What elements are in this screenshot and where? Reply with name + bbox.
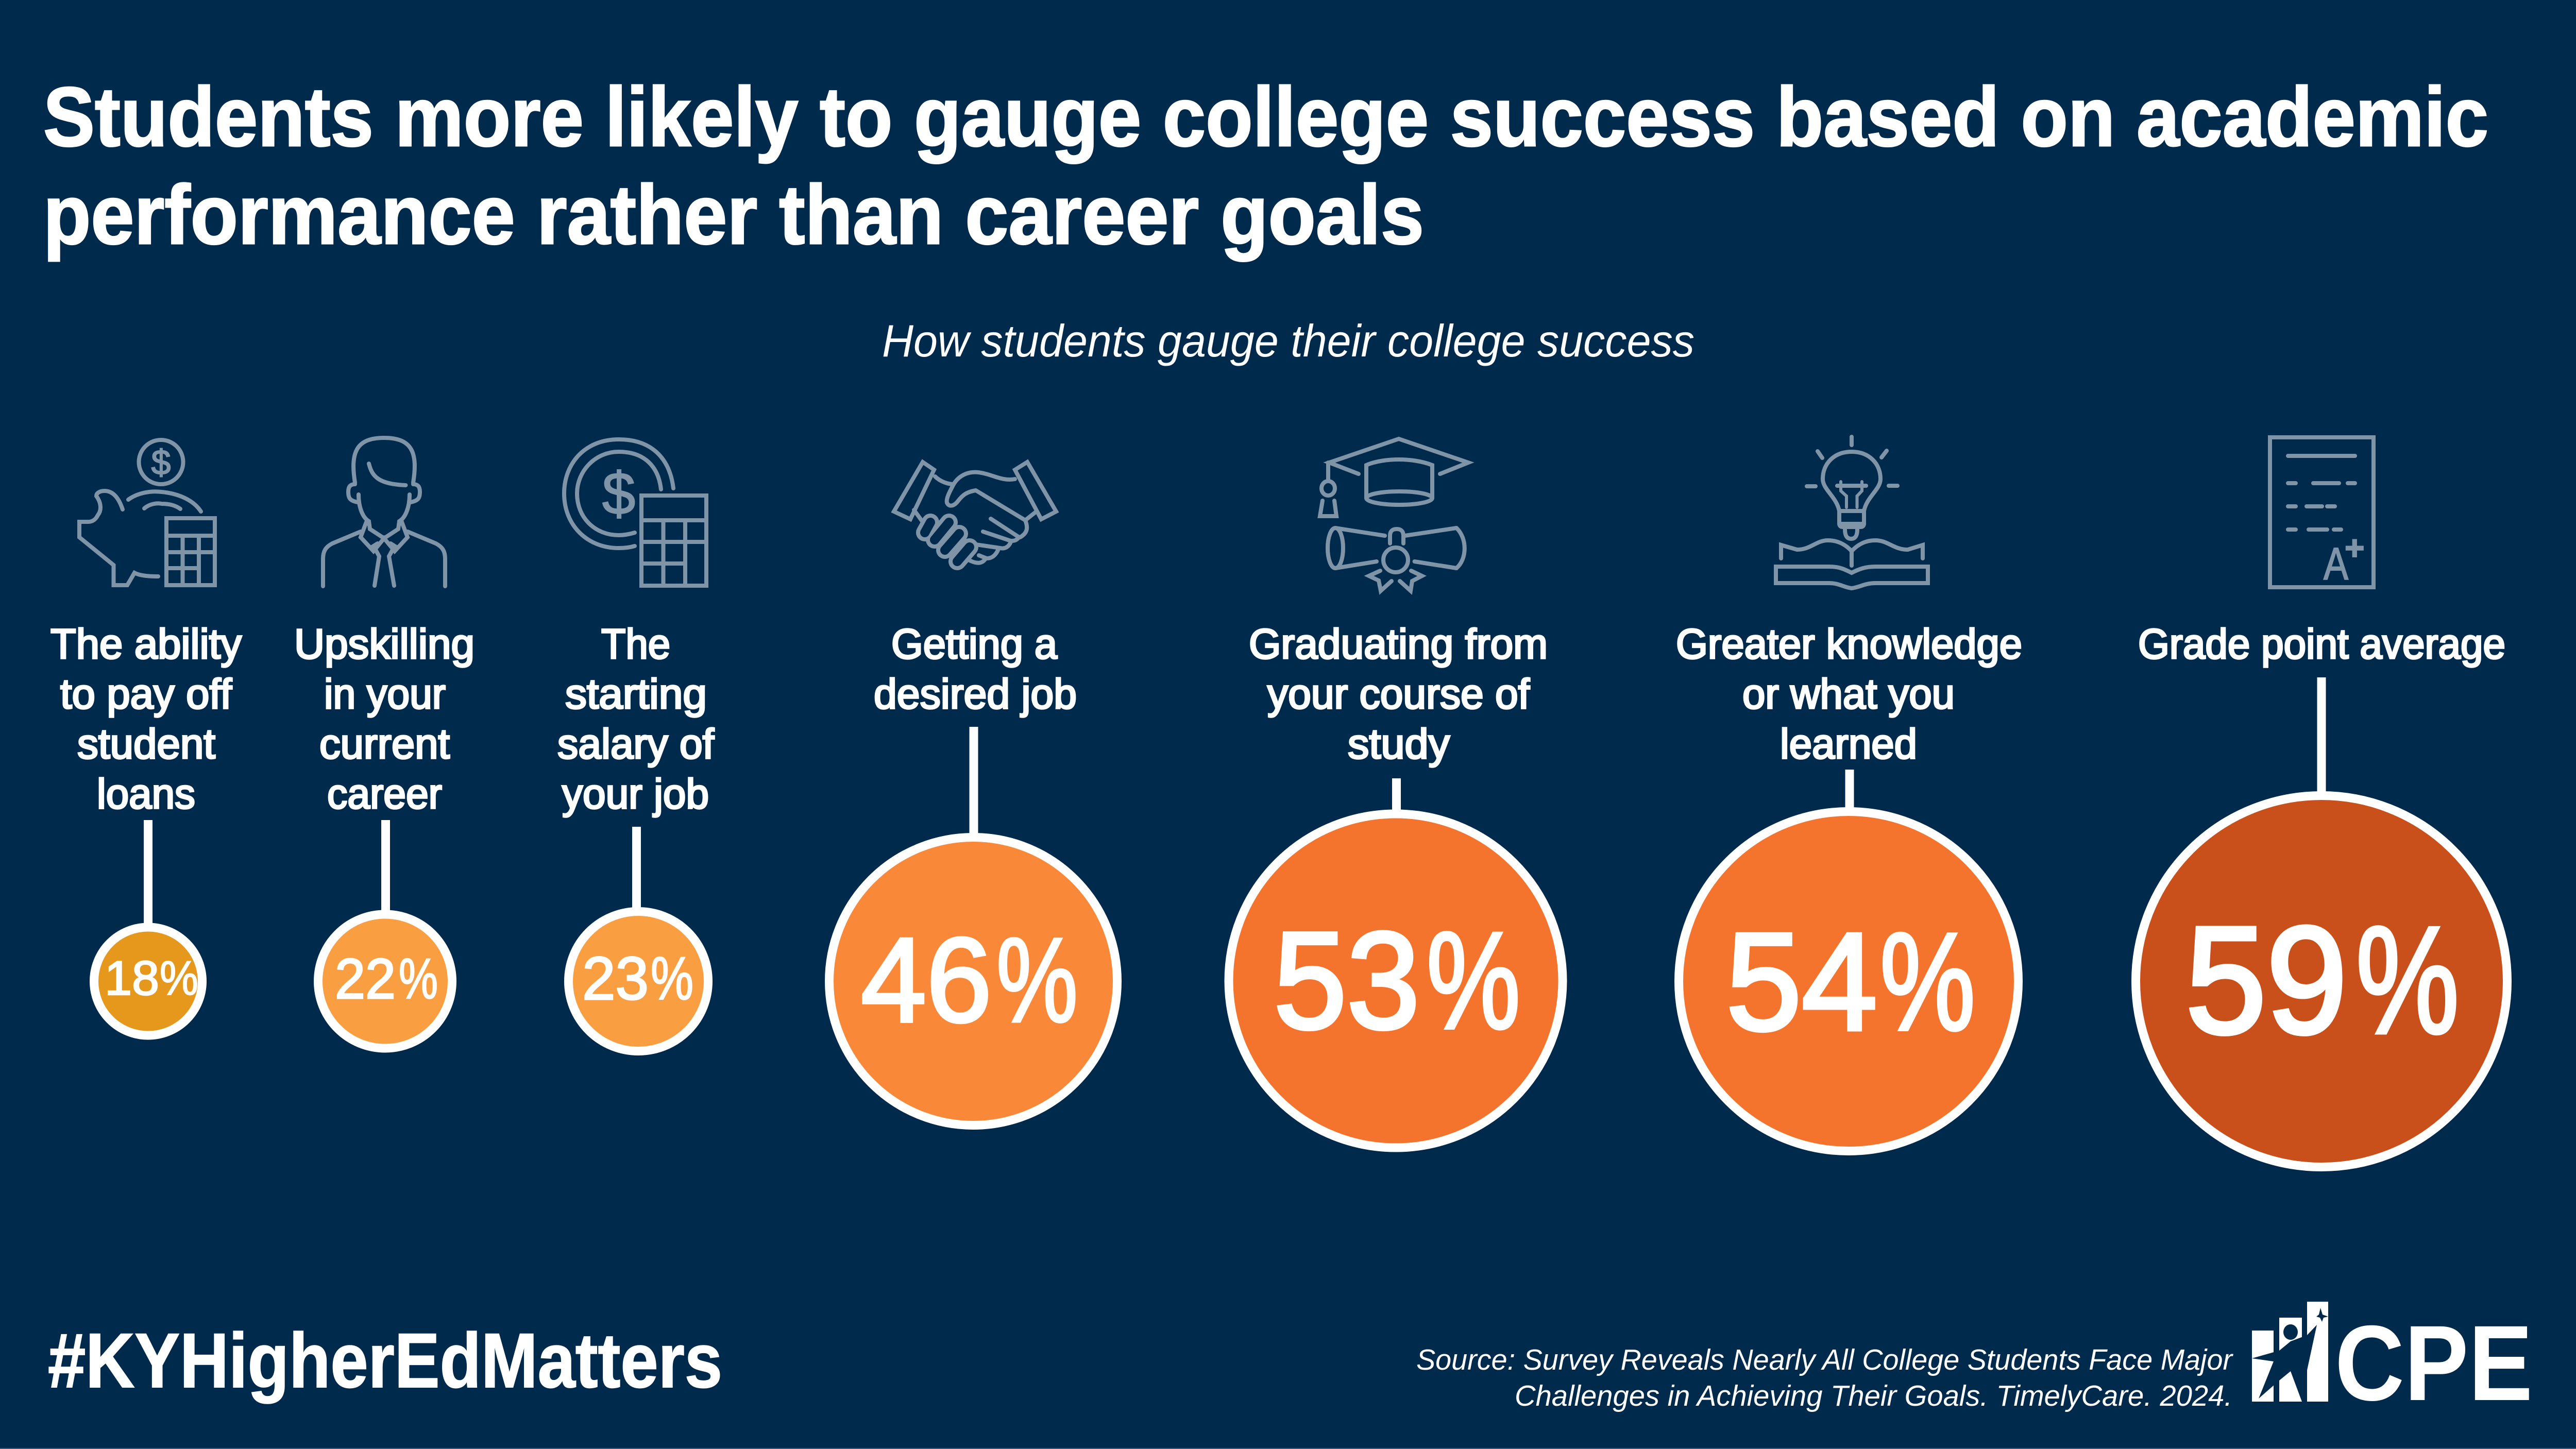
icon: coins and calculator <box>564 439 706 586</box>
subtitle: How students gauge their college success <box>882 315 1694 366</box>
column: greater knowledge or what you learned <box>1676 437 2022 1151</box>
logo wordmark: CPE <box>2335 1304 2533 1423</box>
circle 53%: 53 <box>1274 903 1420 1058</box>
icon: graded test paper: A <box>2324 538 2348 589</box>
label: learned <box>1780 721 1917 768</box>
icon: handshake <box>894 462 1056 563</box>
label: or what you <box>1742 671 1955 718</box>
title <box>43 70 2488 262</box>
label <box>1676 621 2022 768</box>
label: desired job <box>874 671 1077 718</box>
label: Upskilling <box>294 621 474 668</box>
circle 59%: 59 <box>2185 895 2347 1065</box>
source note: Source: Survey Reveals Nearly All College Students Face Major <box>1416 1343 2233 1376</box>
label: student <box>77 721 215 768</box>
label <box>50 621 242 817</box>
logo: CPE <box>2252 1302 2533 1423</box>
circle 22%: 22 <box>335 947 396 1011</box>
circle 53%: % <box>1427 903 1520 1058</box>
label: starting <box>565 671 707 718</box>
label: in your <box>324 671 446 718</box>
circle 53% <box>1229 814 1563 1148</box>
label: Greater knowledge <box>1676 621 2022 668</box>
connector line <box>2317 677 2326 793</box>
column: grade point average <box>2136 437 2507 1167</box>
label: Grade point average <box>2138 621 2505 668</box>
circle 18%: 18 <box>105 951 159 1005</box>
connector line <box>632 827 641 909</box>
label: The <box>601 621 670 668</box>
column: upskilling in your current career <box>294 438 474 1048</box>
circle 18% <box>94 927 202 1035</box>
label: your course of <box>1267 671 1530 718</box>
column: ability to pay off student loans <box>50 440 242 1035</box>
circle 23%: % <box>651 945 693 1013</box>
icon: graded test paper <box>2270 437 2374 589</box>
circle 54%: 54 <box>1726 905 1877 1060</box>
connector line <box>1845 770 1854 809</box>
label: current <box>319 721 450 768</box>
label: salary of <box>557 721 714 768</box>
column: starting salary of your job <box>557 439 714 1051</box>
circle 23% <box>569 912 708 1051</box>
connector line <box>381 820 390 913</box>
source note <box>1416 1343 2233 1412</box>
icon: piggy bank with coin and calculator: $ <box>151 443 171 482</box>
icon: graded test paper: + <box>2345 529 2365 567</box>
circle 54%: % <box>1880 905 1975 1060</box>
label: Graduating from <box>1249 621 1548 668</box>
source note: Challenges in Achieving Their Goals. TimelyCare. 2024. <box>1515 1379 2232 1412</box>
label <box>874 621 1077 718</box>
connector line <box>144 820 152 926</box>
circle 54% <box>1679 812 2019 1151</box>
title: performance rather than career goals <box>43 167 1424 262</box>
label: Getting a <box>891 621 1057 668</box>
circle 22% <box>318 914 452 1048</box>
column: graduating from your course of study <box>1229 439 1563 1148</box>
label <box>1249 621 1548 768</box>
circle 46%: 46 <box>861 913 992 1047</box>
icon: coins and calculator: $ <box>602 460 635 527</box>
label: The ability <box>50 621 242 668</box>
label: study <box>1348 721 1450 768</box>
circle 18%: % <box>160 951 198 1005</box>
circle 59% <box>2136 795 2507 1167</box>
label <box>294 621 474 817</box>
label: to pay off <box>60 671 232 718</box>
icon: person in suit <box>323 438 445 586</box>
circle 23%: 23 <box>582 945 649 1013</box>
hashtag: #KYHigherEdMatters <box>48 1317 722 1404</box>
label: your job <box>562 771 709 817</box>
icon: piggy bank with coin and calculator <box>79 440 215 585</box>
label <box>557 621 714 817</box>
label: career <box>327 771 442 817</box>
logo mark: bars with star figure <box>2252 1302 2328 1402</box>
circle 46%: % <box>996 913 1078 1047</box>
circle 46% <box>829 838 1117 1125</box>
column: getting a desired job <box>829 462 1117 1125</box>
circle 22%: % <box>399 947 438 1011</box>
circle 59%: % <box>2356 895 2459 1065</box>
connector line <box>970 727 978 835</box>
icon: light bulb over book <box>1776 437 1928 588</box>
label: loans <box>97 771 195 817</box>
icon: graduation cap and diploma <box>1320 439 1468 591</box>
connector line <box>1392 778 1401 812</box>
